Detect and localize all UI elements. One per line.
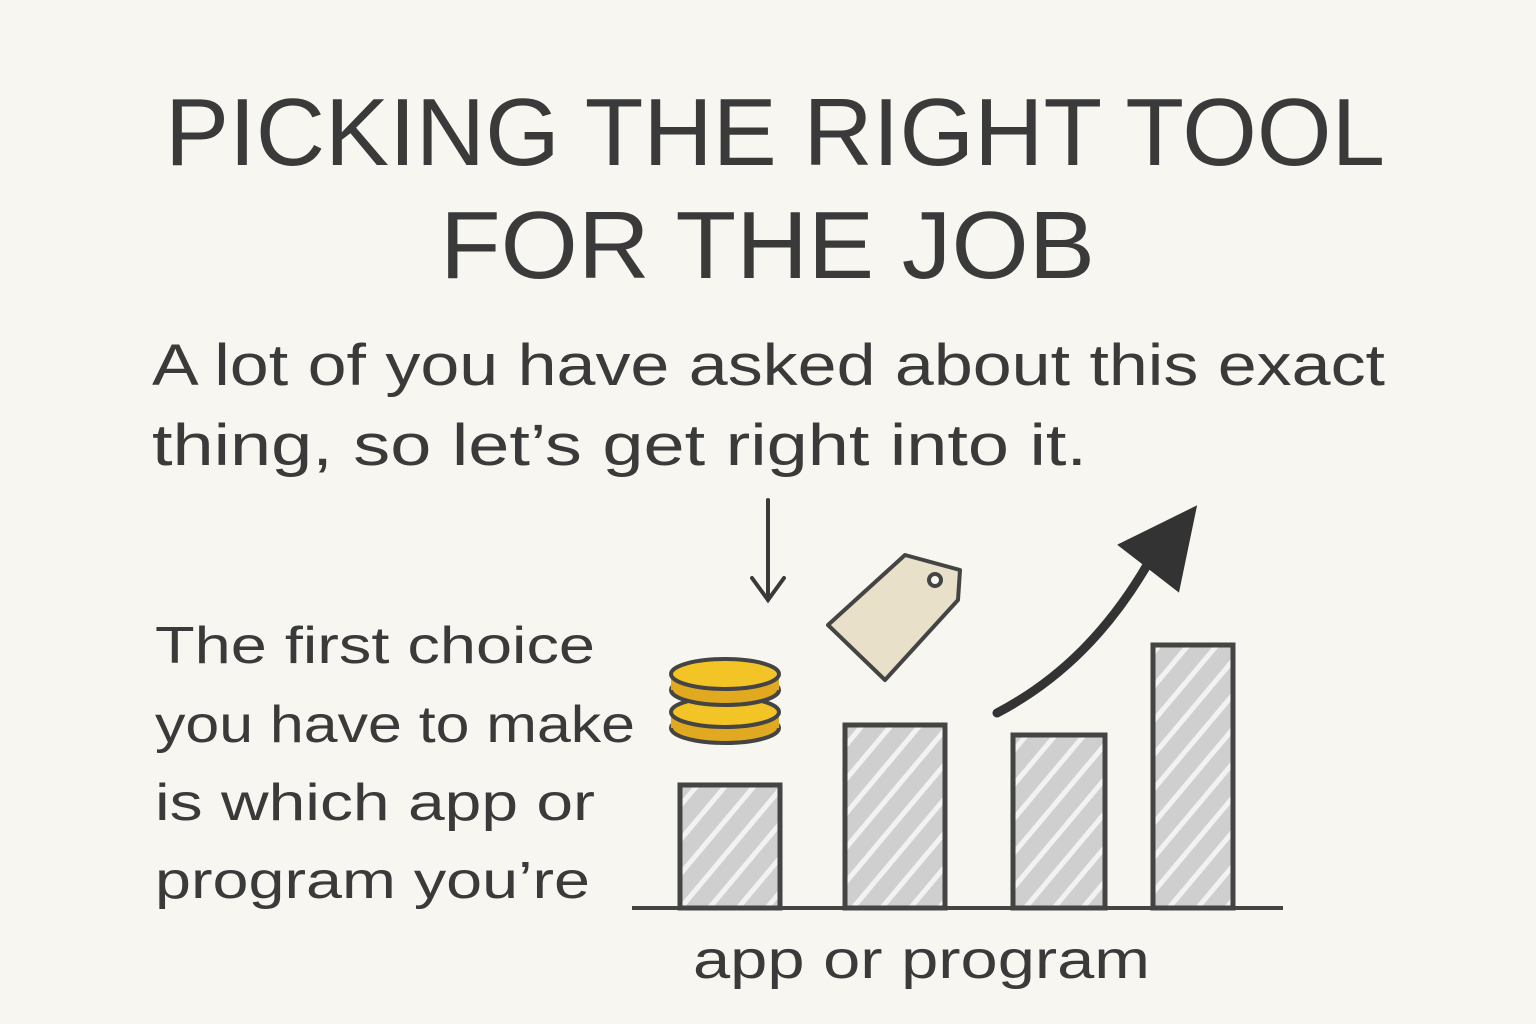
left text block: is which app or	[155, 774, 595, 832]
icon: coins	[671, 659, 779, 743]
left text block: The first choice	[155, 617, 595, 675]
axis label: app or program	[693, 930, 1150, 990]
intro text: thing, so let’s get right into it.	[152, 413, 1087, 478]
intro text	[152, 333, 1385, 478]
arrow: down	[752, 500, 784, 600]
left text block	[155, 617, 635, 910]
title: FOR THE JOB	[440, 192, 1095, 299]
left text block: program you’re	[155, 852, 590, 910]
bar chart	[632, 645, 1283, 908]
left text block: you have to make	[155, 696, 635, 754]
title	[165, 79, 1385, 299]
icon: price tag	[828, 555, 960, 680]
arrow: trend up	[997, 508, 1195, 713]
intro text: A lot of you have asked about this exact	[152, 333, 1385, 398]
title: PICKING THE RIGHT TOOL	[165, 79, 1385, 186]
